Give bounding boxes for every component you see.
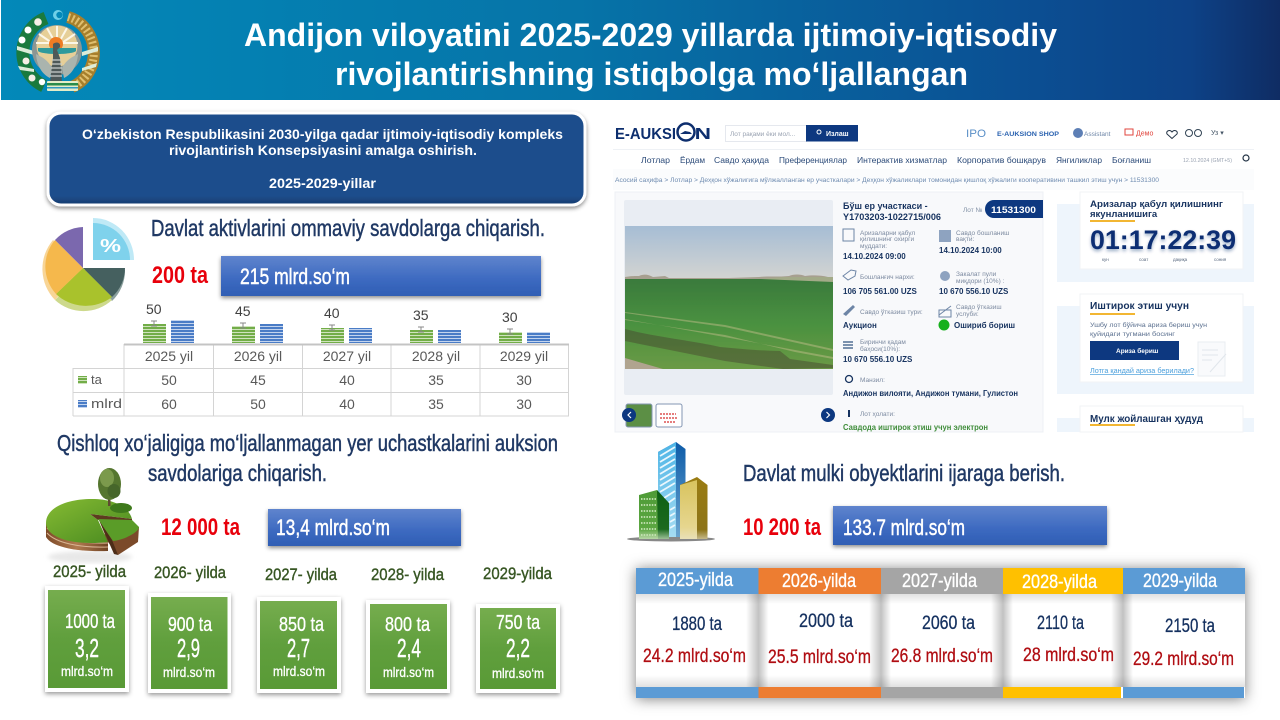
table values: 30 (516, 372, 532, 388)
card: 2025 land: 1000 ta (65, 611, 116, 633)
top links: E-AUKSION SHOP (997, 131, 1060, 138)
card: 2028 land: 2,4 (397, 633, 421, 663)
data labels: 45 (235, 303, 251, 319)
breadcrumb: Асосий саҳифа > Лотлар > Деҳқон хўжалигига мўлжалланган ер участкалари > Деҳқон хўжаликлари томонидан қишлоқ хўжалиги кооперативини ташкил этиш учун > 11531300 (615, 177, 1160, 184)
site logo: E-AUKSI (615, 126, 676, 143)
card: 2026 land (148, 593, 231, 693)
title: Andijon viloyatini 2025-2029 yillarda ijtimoiy-iqtisodiy (244, 17, 1057, 53)
year labels: land: 2025- yilda (53, 562, 126, 581)
countdown card: 01:17:22:39 (1090, 225, 1236, 255)
card: 2025 land: 3,2 (75, 633, 99, 663)
table values: 35 (428, 372, 444, 388)
top links: Уз ▾ (1211, 130, 1224, 137)
heading: renting state property: Davlat mulki obyektlarini ijaraga berish. (743, 460, 1065, 486)
column: 2028 rent: 2028-yilda (1022, 572, 1097, 593)
navigation menu: Янгиликлар (1056, 155, 1102, 165)
lot title (843, 201, 941, 222)
heading: non-agricultural land: Qishloq xo‘jaligiga mo‘ljallanmagan yer uchastkalarini auksion (57, 430, 558, 456)
icon: city buildings (627, 442, 715, 542)
site logo (615, 124, 711, 143)
card: 2026 land: 2,9 (177, 633, 200, 663)
column: 2028 rent (1003, 568, 1123, 698)
table values: 40 (339, 396, 355, 412)
data labels: 35 (413, 307, 429, 323)
table values: 50 (250, 396, 266, 412)
panel: concept box: 2025-2029-yillar (269, 175, 377, 191)
card: 2027 land (257, 597, 341, 693)
card: 2025 land: mlrd.so‘m (61, 663, 113, 679)
countdown card: Аризалар қабул қилишнинг (1090, 199, 1223, 210)
value bar: 133.7 mlrd (833, 506, 1107, 545)
table values: 2029 yil (500, 348, 548, 364)
column: 2025 rent (636, 568, 758, 698)
icon: land plot with tree (46, 468, 139, 563)
column: 2029 rent: 2150 ta (1165, 616, 1215, 637)
card: 2027 land: 2,7 (287, 633, 310, 663)
lot attributes (843, 229, 1018, 432)
search box (726, 125, 858, 142)
table values: 40 (339, 372, 355, 388)
navigation menu: Боғланиш (1112, 155, 1151, 165)
card: 2028 land: mlrd.so‘m (383, 664, 434, 680)
table values: 2027 yil (323, 348, 371, 364)
top links (966, 128, 1224, 140)
lot title: Бўш ер участкаси - (843, 201, 928, 211)
heading: non-agricultural land: savdolariga chiqarish. (148, 460, 327, 486)
lot number badge: Лот № (963, 207, 983, 214)
year labels: land: 2028- yilda (371, 565, 444, 584)
navigation menu: Лотлар (641, 155, 670, 165)
lot number badge: 11531300 (991, 205, 1036, 216)
table values: 45 (250, 372, 266, 388)
panel: yearly rent table (636, 568, 1245, 698)
lot attributes: миқдори (10%) : (956, 278, 1005, 285)
countdown card: кун (1102, 257, 1109, 262)
column: 2028 rent: 2110 ta (1037, 613, 1084, 634)
lot photo (624, 200, 833, 395)
lot attributes: Манзил: (860, 377, 885, 384)
gallery thumbnails (622, 404, 835, 427)
lot attributes: Закалат пули (956, 271, 997, 278)
data labels: 50 (146, 301, 162, 317)
total count: 200 ta: 200 ta (152, 262, 209, 289)
apply card: Ариза бериш (1116, 347, 1158, 355)
apply card: Иштирок этиш учун (1090, 301, 1189, 312)
top links: IPO (966, 128, 986, 140)
total count: 12 000 ta: 12 000 ta (161, 514, 241, 541)
lot details panel (615, 192, 1043, 432)
icon: pie chart with percent slice: % (100, 236, 121, 256)
column: 2029 rent: 29.2 mlrd.so‘m (1133, 649, 1234, 670)
year labels: land: 2026- yilda (154, 563, 226, 582)
bars: ta and mlrd (143, 320, 550, 343)
year labels: land: 2029-yilda (483, 564, 552, 583)
countdown card (1080, 192, 1243, 269)
lot attributes: 14.10.2024 10:00 (939, 246, 1002, 255)
value bar: 13,4 mlrd: 13,4 mlrd.so‘m (276, 515, 390, 540)
card: 2026 land: mlrd.so‘m (163, 664, 215, 680)
apply card: Ушбу лот бўйича ариза бериш учун (1090, 321, 1207, 329)
lot attributes: Савдода иштирок этиш учун электрон (843, 423, 988, 432)
lot attributes: 14.10.2024 09:00 (843, 252, 906, 261)
column: 2025 rent: 2025-yilda (658, 570, 733, 591)
lot attributes: Ошириб бориш (954, 321, 1015, 330)
column: 2026 rent: 25.5 mlrd.so‘m (768, 647, 871, 668)
title: rivojlantirishning istiqbolga mo‘ljallangan (335, 56, 968, 92)
lot attributes: 10 670 556.10 UZS (843, 355, 913, 364)
lot attributes: Андижон вилояти, Андижон тумани, Гулистон (843, 389, 1018, 398)
apply card: қуйидаги тугмани босинг (1090, 330, 1176, 338)
search box: Излаш (826, 131, 849, 138)
lot attributes: 10 670 556.10 UZS (939, 287, 1009, 296)
navigation menu: Ёрдам (680, 155, 705, 165)
data labels: 30 (502, 309, 518, 325)
lot attributes: Савдо ўтказиш тури: (860, 308, 923, 316)
column: 2026 rent: 2026-yilda (782, 571, 856, 592)
panel: concept box: O‘zbekiston Respublikasini 2030-yilga qadar ijtimoiy-iqtisodiy kompleks (82, 126, 563, 142)
column: 2029 rent (1123, 568, 1245, 698)
column: 2027 rent: 2060 ta (922, 613, 975, 634)
legend (78, 372, 122, 411)
lot attributes: Биринчи қадам (860, 339, 906, 346)
lot attributes: Лот ҳолати: (860, 411, 895, 418)
card: 2029 land (476, 604, 560, 693)
card: 2028 land: 800 ta (385, 614, 431, 636)
column: 2026 rent: 2000 ta (799, 611, 853, 632)
lot number badge (963, 200, 1043, 218)
card: 2026 land: 900 ta (168, 614, 213, 636)
navigation menu: Корпоратив бошқарув (957, 155, 1046, 165)
lot attributes: Савдо бошланиш (956, 229, 1009, 237)
table values: 50 (161, 372, 177, 388)
countdown card: якунланишига (1090, 209, 1158, 220)
lot attributes: муддати: (860, 243, 887, 250)
card: 2025 land (45, 586, 129, 692)
panel: concept box (48, 113, 585, 205)
heading: public auction of state assets: Davlat aktivlarini ommaviy savdolarga chiqarish. (151, 215, 545, 241)
value bar: 215 mlrd: 215 mlrd.so‘m (240, 264, 350, 289)
year labels: land: 2027- yilda (265, 565, 337, 584)
card: 2027 land: 850 ta (279, 614, 325, 636)
countdown card: дақиқа (1173, 257, 1188, 262)
lot attributes: Аукцион (843, 321, 877, 330)
top links: Демо (1136, 130, 1153, 138)
legend: mlrd (91, 396, 122, 411)
navigation menu (641, 155, 1249, 165)
value bar: 215 mlrd (221, 256, 541, 296)
table values: 2026 yil (234, 348, 282, 364)
legend: ta (91, 372, 103, 387)
navigation menu: Савдо ҳақида (714, 155, 769, 165)
countdown card: сония (1214, 257, 1227, 262)
value bar: 13,4 mlrd (268, 509, 461, 546)
location card: Мулк жойлашган ҳудуд (1090, 414, 1204, 425)
location card (1080, 406, 1243, 432)
navigation menu: Интерактив хизматлар (857, 155, 947, 165)
lot attributes: баҳоси(10%): (860, 345, 900, 353)
lot attributes: Бошланғич нархи: (860, 274, 915, 281)
lot title: Y1703203-1022715/006 (843, 212, 941, 222)
column: 2025 rent: 24.2 mlrd.so‘m (643, 646, 746, 667)
apply card: Лотга қандай ариза берилади? (1090, 367, 1194, 375)
countdown card: соат (1139, 257, 1148, 262)
column: 2029 rent: 2029-yilda (1143, 571, 1217, 592)
icon: pie chart with percent slice (42, 218, 134, 311)
card: 2029 land: 750 ta (496, 612, 541, 634)
lot attributes: Аризаларни қабул (860, 229, 915, 237)
icon: state emblem (17, 10, 98, 91)
total count: 10 200 ta: 10 200 ta (743, 514, 821, 541)
year labels: land (53, 562, 552, 584)
top links: Assistant (1084, 131, 1111, 138)
header banner (1, 0, 1280, 100)
navigation menu: Преференциялар (779, 155, 847, 165)
column: 2027 rent: 26.8 mlrd.so‘m (891, 646, 993, 667)
apply card (1080, 294, 1243, 382)
column: 2026 rent (758, 568, 881, 698)
lot attributes: Савдо ўтказиш (956, 303, 1002, 311)
table values: 2028 yil (412, 348, 460, 364)
column: 2027 rent (881, 568, 1003, 698)
navigation menu: 12.10.2024 (GMT+5) (1183, 158, 1232, 164)
table values: 30 (516, 396, 532, 412)
title (244, 17, 1057, 92)
lot attributes: услуби: (956, 310, 979, 318)
lot attributes: 106 705 561.00 UZS (843, 287, 917, 296)
table values (145, 348, 548, 412)
bar chart with data table (73, 301, 569, 416)
table values: 2025 yil (145, 348, 193, 364)
card: 2028 land (366, 600, 450, 693)
site logo: ON (677, 126, 711, 143)
column: 2028 rent: 28 mlrd.so‘m (1023, 645, 1114, 666)
data labels: 40 (324, 305, 340, 321)
value bar: 133.7 mlrd: 133.7 mlrd.so‘m (843, 515, 965, 540)
heading: non-agricultural land (57, 430, 558, 486)
search box: Лот рақами ёки мол... (730, 131, 795, 138)
panel: e-auksion website screenshot (613, 115, 1254, 432)
column: 2027 rent: 2027-yilda (902, 571, 977, 592)
card: 2029 land: 2,2 (506, 633, 530, 663)
data labels (146, 301, 518, 325)
panel: concept box: rivojlantirish Konsepsiyasini amalga oshirish. (169, 142, 477, 158)
table values: 60 (161, 396, 177, 412)
card: 2027 land: mlrd.so‘m (273, 663, 325, 679)
column: 2025 rent: 1880 ta (672, 614, 722, 635)
card: 2029 land: mlrd.so‘m (492, 665, 544, 681)
table values: 35 (428, 396, 444, 412)
lot attributes: қилишнинг охирги (860, 236, 915, 243)
lot attributes: вақти: (956, 236, 974, 243)
